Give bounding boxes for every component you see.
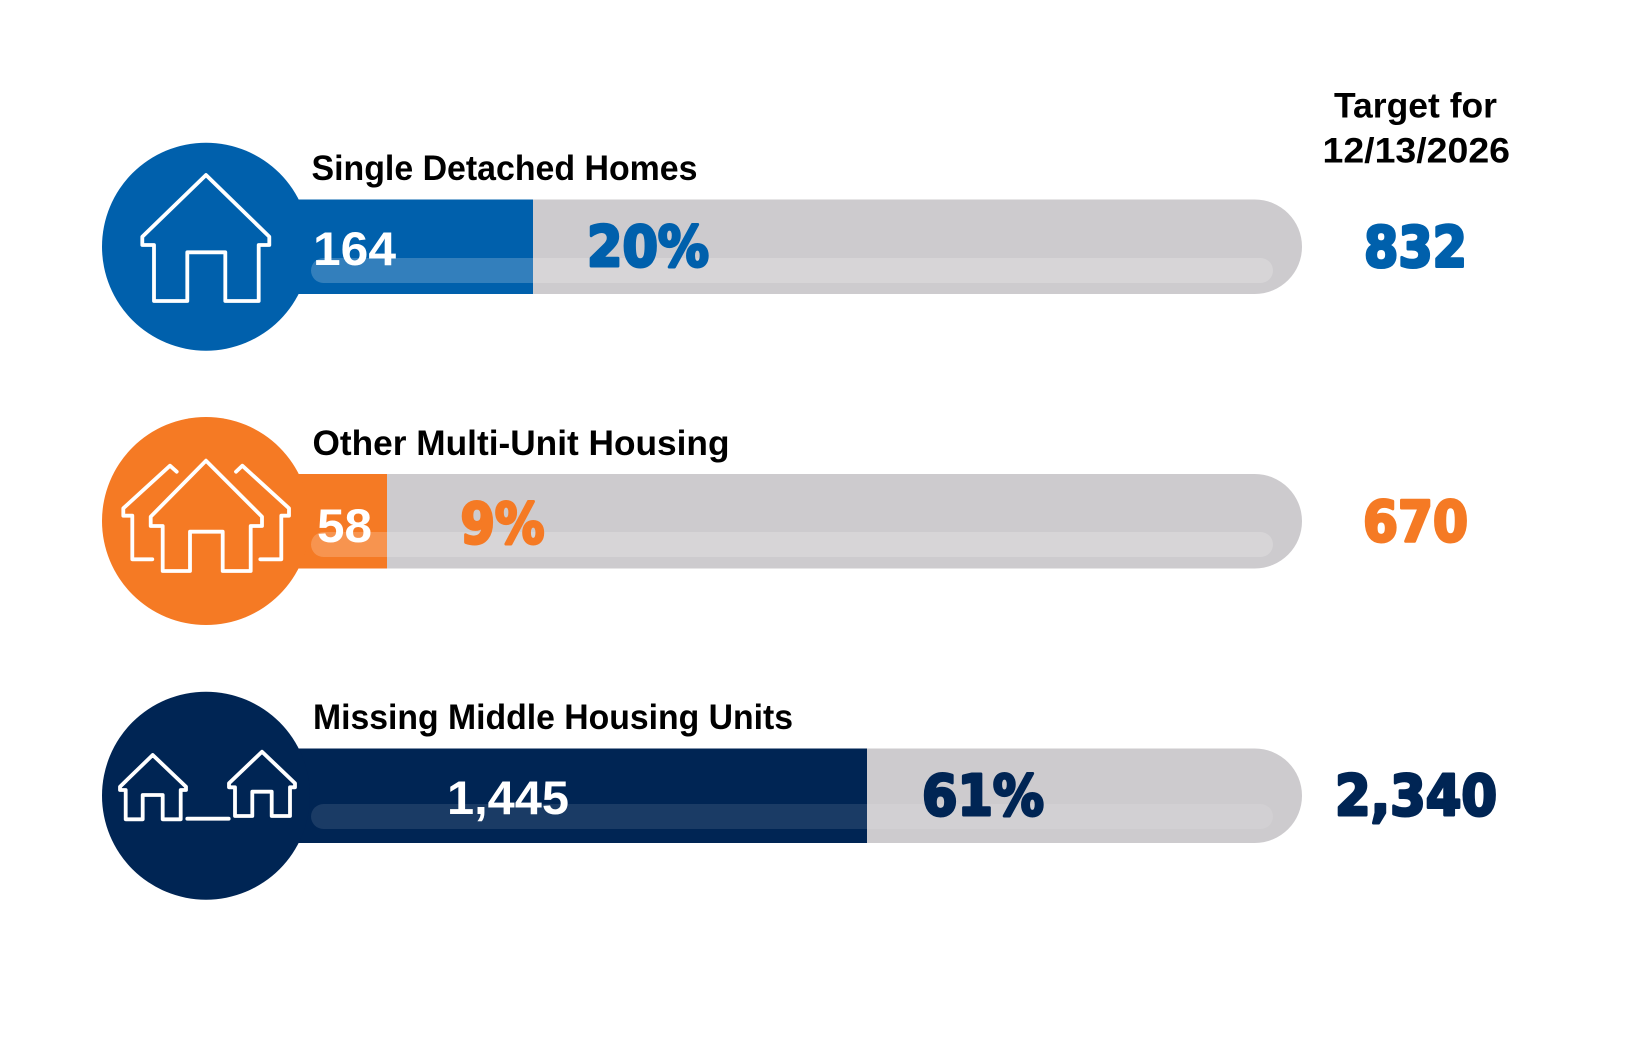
icon: two houses with gap [102, 692, 310, 900]
percent: 9%: 9% [460, 492, 544, 557]
target column heading: 12/13/2026 [1322, 132, 1510, 170]
target: 670: 670 [1363, 490, 1468, 555]
progress bar: other multi-unit housing [206, 474, 1302, 568]
icon: cluster of houses [102, 417, 310, 625]
panel: other multi-unit housing [102, 417, 1468, 625]
percent: 61%: 61% [922, 764, 1044, 829]
target: 2,340: 2,340 [1335, 764, 1497, 829]
target column heading [1322, 86, 1510, 170]
icon: single house [102, 143, 310, 351]
target column heading: Target for [1334, 86, 1497, 126]
label: missing middle housing units: Missing Middle Housing Units [313, 698, 793, 737]
panel: single detached homes [102, 143, 1467, 351]
value: 164: 164 [313, 222, 396, 275]
label: single detached homes: Single Detached Homes [312, 149, 698, 188]
label: other multi-unit housing: Other Multi-Unit Housing [312, 424, 730, 463]
value: 58: 58 [317, 499, 372, 552]
panel: missing middle housing units [102, 692, 1497, 900]
progress bar: single detached homes [206, 200, 1302, 294]
percent: 20%: 20% [587, 215, 709, 280]
value: 1,445: 1,445 [447, 771, 569, 824]
target: 832: 832 [1364, 216, 1467, 280]
progress bar: missing middle housing units [206, 748, 1302, 843]
